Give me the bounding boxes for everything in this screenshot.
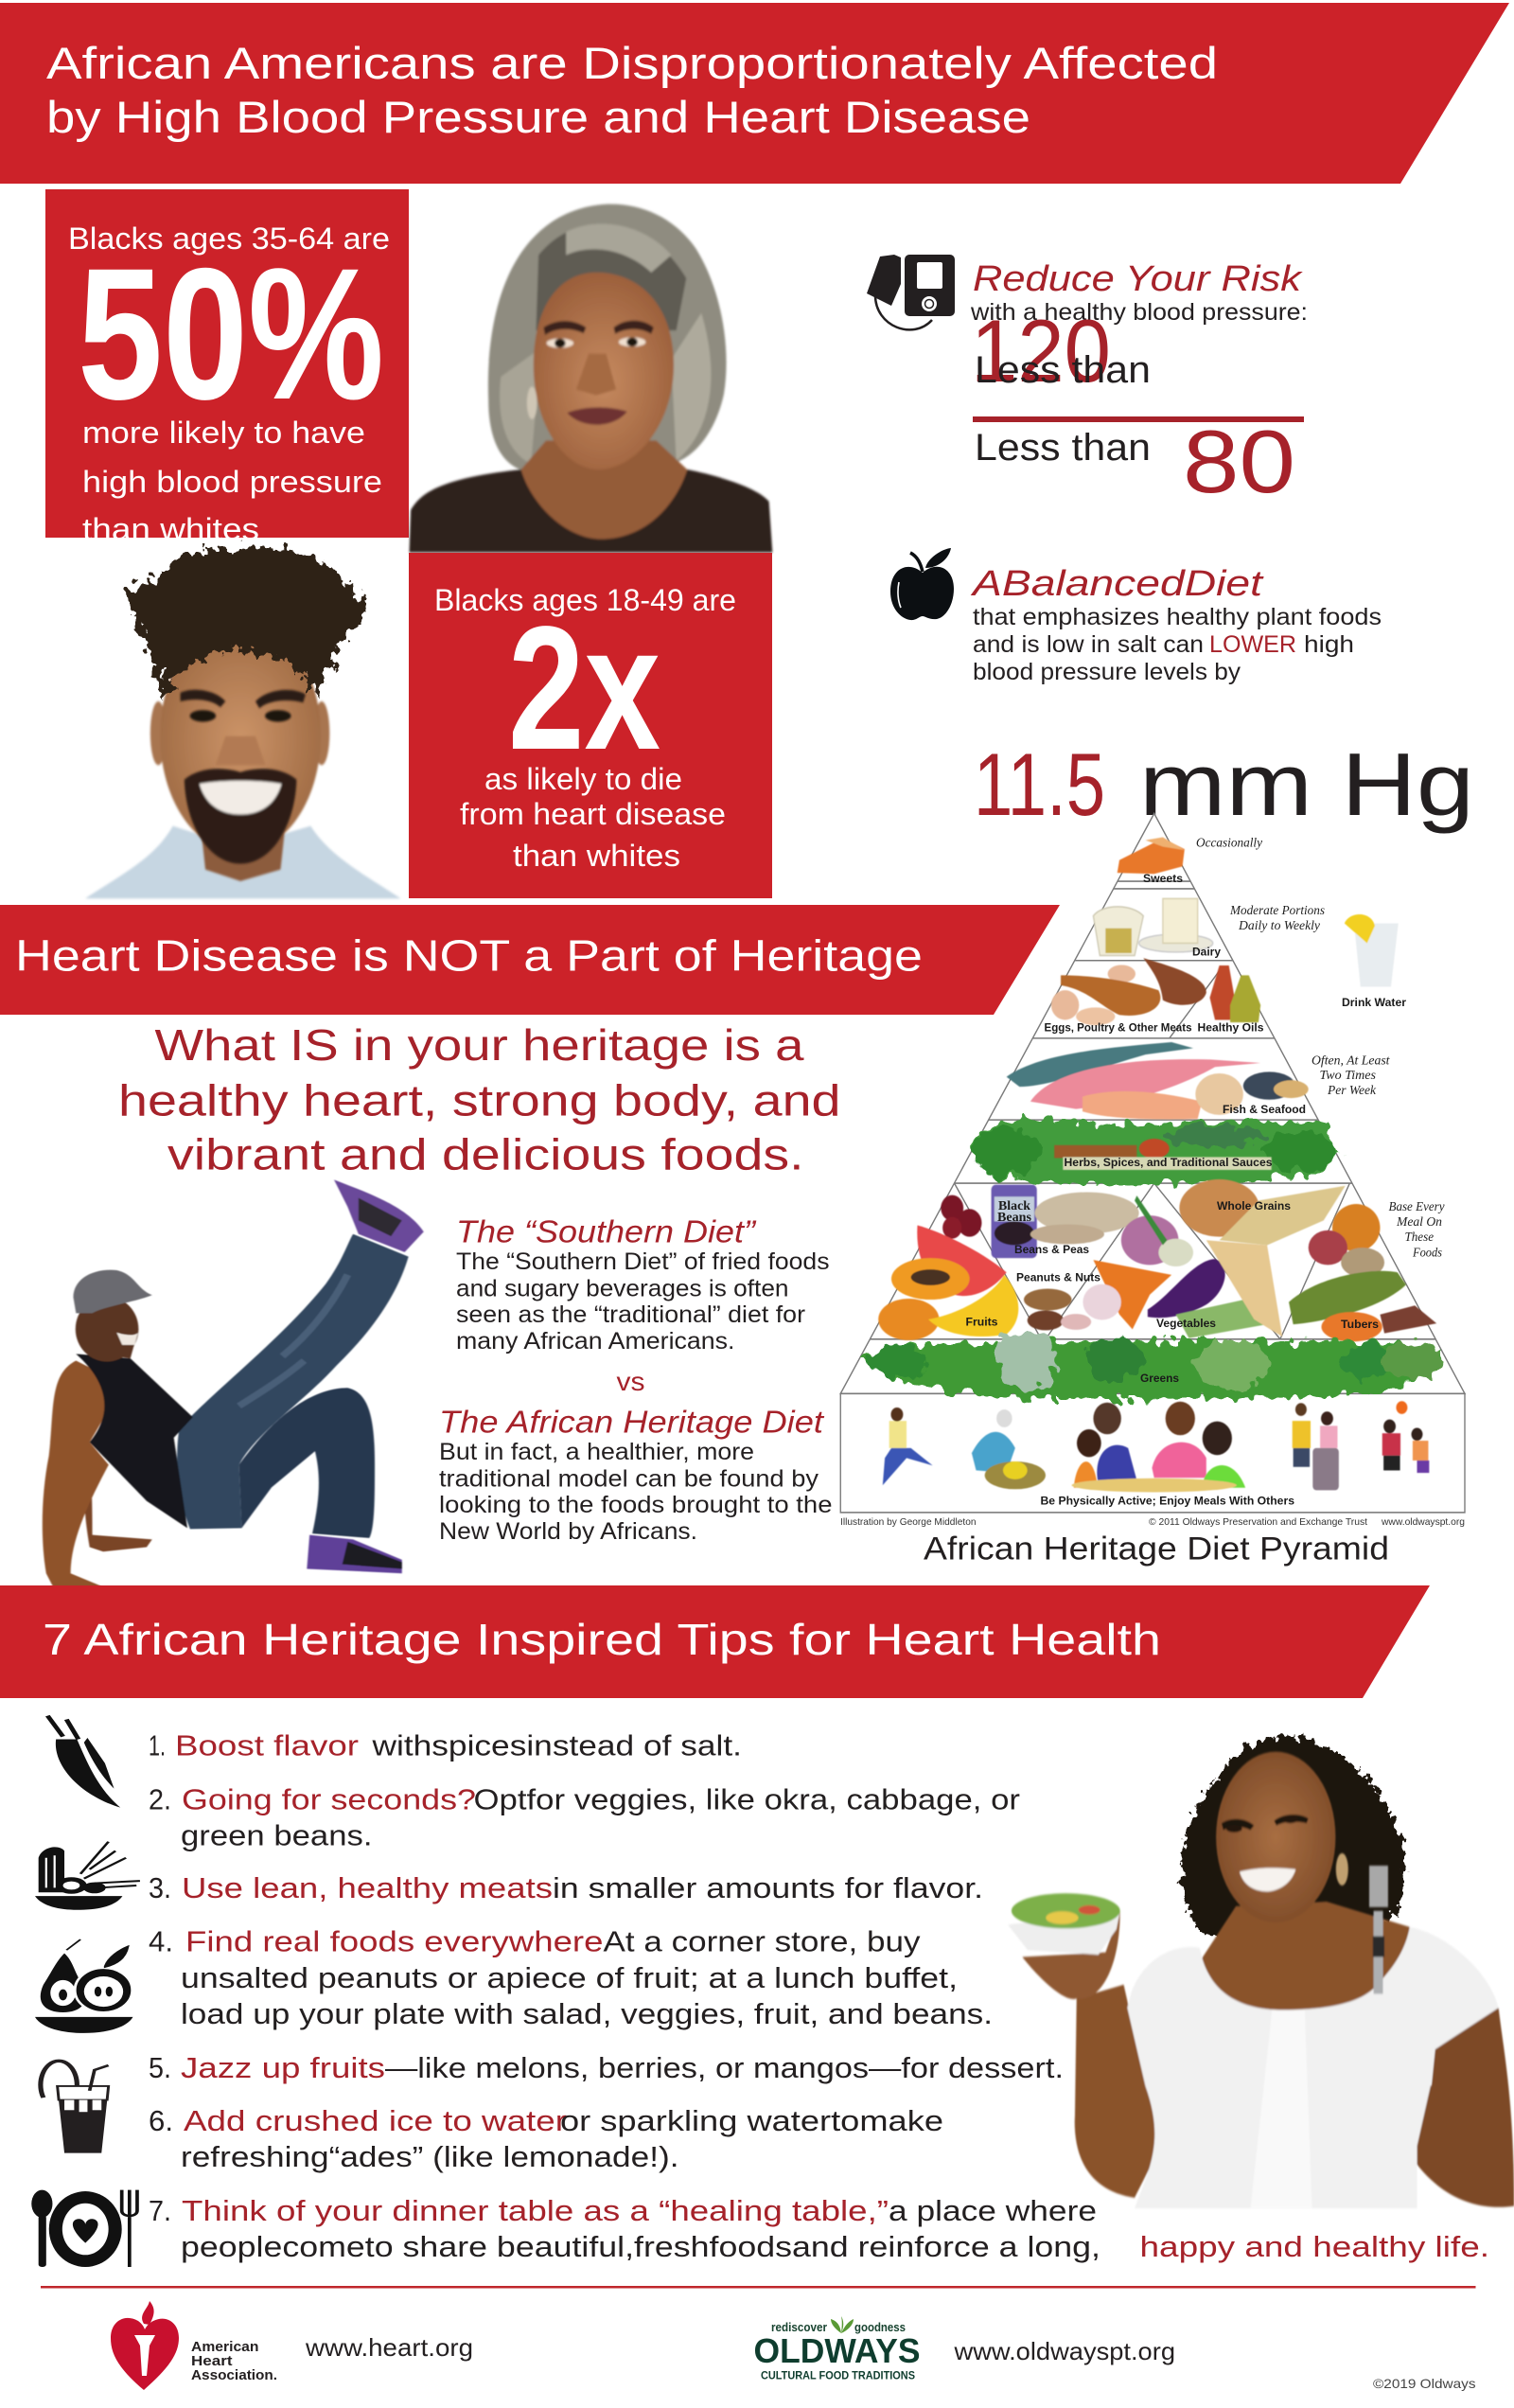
tip 7: happy and healthy life.	[1139, 2230, 1489, 2263]
pyramid tier labels: Black	[998, 1199, 1030, 1213]
pyramid credits: Illustration by George Middleton	[840, 1516, 977, 1528]
pyramid tier labels: Tubers	[1341, 1319, 1379, 1331]
pyramid frequency notes: Often, At Least	[1312, 1054, 1391, 1068]
stat description: more likely to have	[82, 416, 365, 450]
logo: Oldways	[753, 2316, 920, 2381]
meats and oils	[1051, 990, 1079, 1020]
panel: 2x statistic	[409, 553, 772, 898]
logo wordmark: Association.	[191, 2367, 277, 2383]
tip 2: Going for seconds?	[182, 1783, 476, 1815]
tubers	[1332, 1204, 1380, 1251]
stat description: than whites	[82, 512, 259, 546]
tip 1: 1.	[149, 1728, 166, 1762]
tip 3: Use lean, healthy meats	[182, 1871, 553, 1904]
body: looking to the foods brought to the	[439, 1492, 833, 1518]
icon: apple	[890, 548, 954, 620]
heading: a balanced diet: ABalancedDiet	[971, 564, 1264, 604]
sweets	[1118, 839, 1185, 874]
tip 4: Find real foods everywhere	[185, 1925, 604, 1957]
heading: The African Heritage Diet	[439, 1405, 825, 1439]
pyramid tier labels: Drink Water	[1342, 998, 1407, 1009]
tip 6: 6.	[149, 2104, 173, 2137]
title: African Americans are Disproportionately Affected	[46, 38, 1218, 88]
tip 5: —like melons, berries, or mangos—for dessert.	[385, 2051, 1064, 2084]
stat description	[83, 420, 380, 538]
tip 4: At a corner store, buy	[604, 1925, 921, 1957]
tip 2: Optfor veggies, like okra, cabbage, or	[473, 1783, 1020, 1815]
subheading: with a healthy blood pressure:	[970, 299, 1308, 326]
photo: smiling woman with salad and fork	[1008, 1737, 1514, 2208]
icon: chili pepper	[47, 1716, 120, 1808]
label less than: Less than	[975, 427, 1151, 469]
number 80: 80	[1183, 412, 1295, 511]
pyramid frequency notes: Moderate Portions	[1229, 904, 1326, 918]
stat description: than whites	[513, 839, 680, 873]
logo: Oldways: rediscover	[771, 2320, 827, 2334]
diet description: high	[1304, 631, 1354, 658]
body: many African Americans.	[456, 1328, 734, 1354]
diet description: and is low in salt can	[973, 631, 1204, 658]
tip 4: 4.	[149, 1925, 173, 1957]
pyramid tier labels: Sweets	[1143, 874, 1183, 885]
icon: leaf sprig	[831, 2316, 854, 2333]
section banner: tips	[0, 1585, 1430, 1698]
pyramid frequency notes: Per Week	[1327, 1084, 1377, 1098]
body: traditional model can be found by	[439, 1465, 819, 1492]
stat description: as likely to die	[484, 762, 682, 796]
tip 5	[149, 2051, 1064, 2084]
logo: Oldways: CULTURAL FOOD TRADITIONS	[761, 2370, 915, 2381]
body	[456, 1248, 829, 1354]
tip 1	[149, 1728, 742, 1762]
tip 6: Add crushed ice to water	[184, 2104, 567, 2137]
tip 6	[149, 2104, 943, 2173]
copyright: ©2019 Oldways	[1373, 2376, 1476, 2391]
body: and sugary beverages is often	[456, 1276, 789, 1302]
pyramid caption: African Heritage Diet Pyramid	[924, 1532, 1389, 1567]
pyramid frequency notes: Meal On	[1396, 1215, 1442, 1230]
text block: the african heritage diet	[439, 1405, 833, 1545]
tip 6: or sparkling watertomake	[560, 2104, 943, 2137]
panel: a balanced diet	[890, 548, 1474, 834]
icon: drink with lemon	[41, 2061, 109, 2153]
pyramid frequency notes: Daily to Weekly	[1238, 919, 1321, 933]
big statistic 11.5 mm Hg: 11.5	[974, 735, 1105, 834]
stat description	[460, 762, 726, 873]
pyramid frequency notes: Base Every	[1389, 1200, 1445, 1214]
pyramid tier labels: Greens	[1140, 1373, 1179, 1385]
diet description: blood pressure levels by	[973, 659, 1241, 685]
tip 3: 3.	[149, 1871, 171, 1904]
tip 4: load up your plate with salad, veggies, fruit, and beans.	[181, 1997, 993, 2030]
hair	[125, 548, 363, 701]
body: But in fact, a healthier, more	[439, 1439, 754, 1465]
people: family table	[1074, 1461, 1098, 1488]
pyramid structure and food drawing	[840, 813, 1465, 1513]
tagline: healthy heart, strong body, and	[118, 1075, 840, 1124]
website: oldwayspt.org: www.oldwayspt.org	[953, 2337, 1175, 2365]
number 120: 120	[971, 301, 1111, 400]
fruits	[941, 1195, 963, 1221]
pyramid credits: www.oldwayspt.org	[1381, 1516, 1465, 1528]
tip 5: 5.	[149, 2051, 171, 2084]
logo: American Heart Association	[111, 2301, 277, 2390]
logo wordmark: American	[191, 2339, 259, 2355]
pyramid tier labels: Fish & Seafood	[1223, 1105, 1306, 1116]
pyramid tier labels: Whole Grains	[1217, 1201, 1291, 1213]
icon: vegetable plate	[35, 1842, 140, 1910]
icon: blood pressure monitor	[867, 255, 955, 329]
tagline: What IS in your heritage is a	[155, 1020, 804, 1070]
stat description: high blood pressure	[82, 465, 382, 499]
drink water glass	[1354, 924, 1399, 986]
tip 7: a place where	[889, 2194, 1097, 2227]
big statistic 11.5 mm Hg: mm Hg	[1139, 735, 1474, 834]
logo: Oldways: goodness	[854, 2320, 906, 2334]
tip 1: Boost flavor	[175, 1728, 359, 1762]
tip 7: Think of your dinner table as a “healing table,”	[182, 2194, 889, 2227]
tagline: vibrant and delicious foods.	[167, 1130, 804, 1179]
tip 2: green beans.	[181, 1819, 373, 1851]
section banner: heritage	[0, 905, 1060, 1015]
tip 7	[149, 2194, 1489, 2263]
text block: the southern diet	[456, 1213, 829, 1354]
greens	[859, 1332, 1441, 1399]
tagline	[118, 1020, 840, 1179]
people: children	[1382, 1433, 1400, 1456]
photo: older woman with grey hair	[410, 204, 772, 553]
panel: 50% statistic	[45, 189, 409, 546]
diet description	[973, 604, 1382, 685]
pyramid frequency notes: Occasionally	[1196, 837, 1263, 850]
fish and seafood	[1007, 1042, 1193, 1087]
dairy	[1093, 907, 1143, 956]
pyramid frequency notes: These	[1404, 1231, 1434, 1245]
icon: heart and torch	[111, 2301, 179, 2390]
pyramid frequency notes: Two Times	[1319, 1069, 1377, 1083]
pyramid tier labels: Dairy	[1192, 947, 1222, 958]
stat intro text: Blacks ages 18-49 are	[434, 583, 736, 617]
logo wordmark	[191, 2339, 277, 2383]
tip 2: 2.	[149, 1783, 171, 1815]
panel: reduce your risk	[867, 255, 1308, 511]
herbs	[972, 1119, 1341, 1184]
title	[46, 38, 1218, 142]
tip 2	[149, 1783, 1020, 1851]
versus label: vs	[617, 1367, 645, 1396]
people: couple with stroller	[1293, 1421, 1311, 1448]
heading: reduce your risk: Reduce Your Risk	[973, 259, 1303, 299]
beans and peas	[992, 1185, 1037, 1258]
pyramid tier labels: Be Physically Active; Enjoy Meals With Others	[1041, 1496, 1294, 1507]
diet description: LOWER	[1209, 631, 1296, 658]
tip 6: refreshing“ades” (like lemonade!).	[181, 2140, 679, 2173]
tip 3	[149, 1871, 983, 1904]
diet description: that emphasizes healthy plant foods	[973, 604, 1382, 630]
body: The “Southern Diet” of fried foods	[456, 1248, 829, 1275]
pyramid credits: © 2011 Oldways Preservation and Exchange Trust	[1149, 1516, 1367, 1528]
pyramid frequency notes	[1196, 837, 1445, 1261]
whole grains	[1179, 1179, 1259, 1237]
pyramid tier labels: Beans	[997, 1211, 1032, 1225]
website: heart.org: www.heart.org	[305, 2333, 473, 2362]
vegetables	[1121, 1215, 1178, 1265]
body	[439, 1439, 833, 1545]
tip 4	[149, 1925, 993, 2030]
big number 50%: 50%	[78, 229, 384, 438]
title: by High Blood Pressure and Heart Disease	[46, 92, 1030, 142]
big statistic 11.5 mm Hg	[974, 735, 1474, 834]
people: gardener	[972, 1432, 1015, 1473]
heading: The “Southern Diet”	[456, 1213, 757, 1249]
photo: smiling man with curly hair	[85, 548, 401, 898]
big number 2x: 2x	[508, 591, 660, 787]
logo wordmark: Heart	[191, 2353, 233, 2369]
pyramid tier labels	[965, 874, 1407, 1507]
icon: table setting with heart	[31, 2190, 137, 2267]
tip 7: peoplecometo share beautiful,freshfoodsand reinforce a long,	[181, 2230, 1100, 2263]
stat description: from heart disease	[460, 797, 726, 831]
label less than: Less than	[975, 349, 1151, 391]
tip 7: 7.	[149, 2194, 171, 2227]
heading: Heart Disease is NOT a Part of Heritage	[15, 931, 923, 981]
tip 5: Jazz up fruits	[181, 2051, 385, 2084]
pyramid tier labels: Healthy Oils	[1198, 1022, 1264, 1034]
stat intro text: Blacks ages 35-64 are	[68, 221, 390, 256]
heading: 7 African Heritage Inspired Tips for Heart Health	[43, 1615, 1161, 1664]
logo: Oldways: OLDWAYS	[753, 2331, 920, 2370]
icon: fruit plate	[35, 1939, 133, 2033]
title banner	[0, 3, 1509, 184]
pyramid tier labels: Fruits	[965, 1318, 997, 1329]
body: seen as the “traditional” diet for	[456, 1301, 805, 1328]
pyramid tier labels: Beans & Peas	[1014, 1245, 1089, 1256]
pyramid tier labels: Vegetables	[1156, 1319, 1216, 1330]
body: New World by Africans.	[439, 1518, 697, 1545]
photo: dancer doing a leg raise	[43, 1179, 424, 1602]
pyramid tier labels: Eggs, Poultry & Other Meats	[1045, 1022, 1192, 1034]
tip 3: in smaller amounts for flavor.	[553, 1871, 983, 1904]
tips list	[31, 1716, 1489, 2267]
pyramid frequency notes: Foods	[1412, 1246, 1442, 1261]
pyramid tier labels: Peanuts & Nuts	[1016, 1272, 1100, 1284]
pyramid credits	[840, 1516, 1465, 1528]
chart: African Heritage Diet Pyramid	[840, 813, 1465, 1567]
tip 1: withspicesinstead of salt.	[371, 1728, 742, 1762]
people: runner	[889, 1421, 907, 1448]
tip 4: unsalted peanuts or apiece of fruit; at a lunch buffet,	[181, 1961, 958, 1994]
pyramid tier labels: Herbs, Spices, and Traditional Sauces	[1064, 1158, 1272, 1169]
